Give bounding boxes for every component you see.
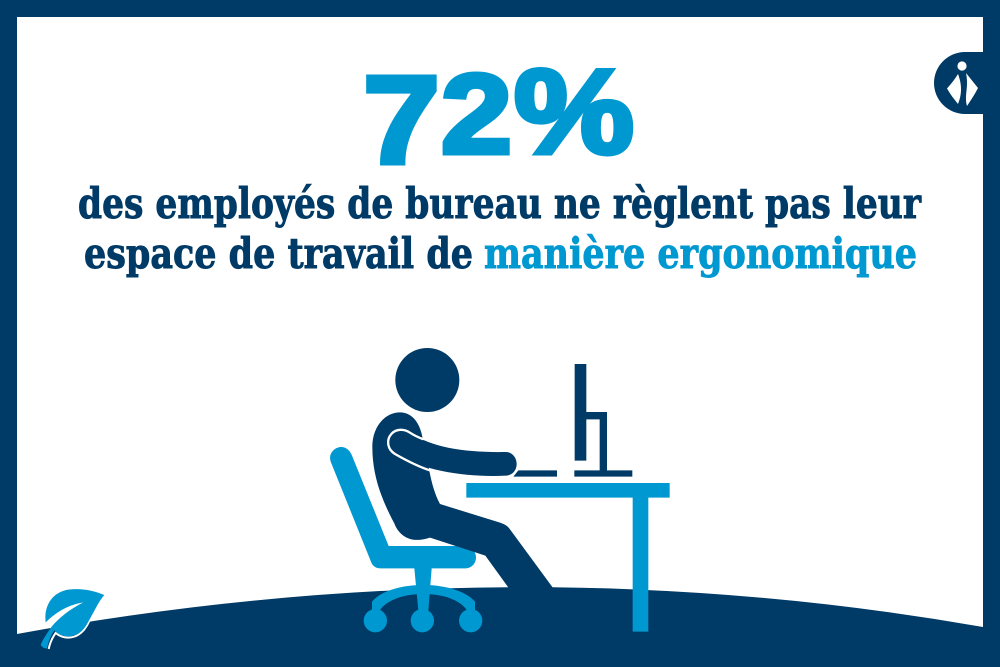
subtitle text xyxy=(78,179,922,278)
arm outline xyxy=(388,430,431,471)
title: 72%: 2 xyxy=(441,51,512,177)
title: 72%: % xyxy=(514,45,634,179)
subtitle text: espace de travail de xyxy=(84,229,473,278)
body and legs xyxy=(372,412,553,588)
subtitle text: manière ergonomique xyxy=(484,229,917,278)
title: 72% xyxy=(363,45,634,190)
arm xyxy=(388,430,517,476)
head xyxy=(395,348,459,412)
leaf body and stem xyxy=(41,589,104,648)
leaf outline on ground xyxy=(49,621,89,649)
icon: leaf xyxy=(41,589,104,649)
title: 72%: 7 xyxy=(363,51,440,190)
illustration: person at desk xyxy=(330,348,670,632)
chair xyxy=(330,447,482,632)
desk xyxy=(466,483,670,632)
icon: logo tab xyxy=(934,52,983,114)
keyboard xyxy=(513,470,557,477)
monitor xyxy=(574,364,632,477)
